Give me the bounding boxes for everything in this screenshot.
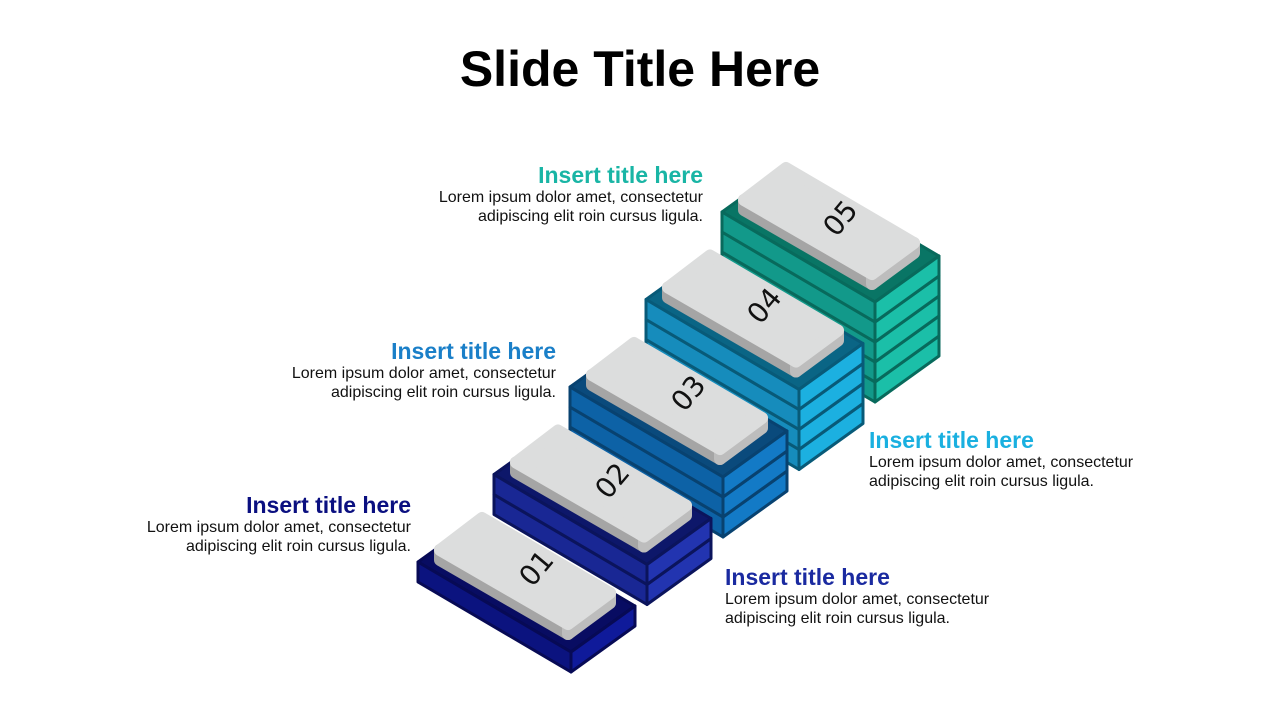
- text block: step 04: Insert title here: [869, 427, 1034, 453]
- step 04: 04: [740, 282, 788, 330]
- text block: step 04: adipiscing elit roin cursus ligula.: [869, 473, 1094, 490]
- text block: step 01: Lorem ipsum dolor amet, consectetur: [147, 519, 411, 536]
- step 03: [570, 341, 787, 537]
- text block: step 01: [147, 492, 411, 555]
- text block: step 05: Insert title here: [538, 162, 703, 188]
- text block: step 03: adipiscing elit roin cursus ligula.: [331, 384, 556, 401]
- text block: step 04: [869, 427, 1133, 490]
- text block: step 02: Insert title here: [725, 564, 890, 590]
- step 02: 02: [588, 457, 636, 505]
- step 05: [722, 166, 939, 402]
- text block: step 03: Lorem ipsum dolor amet, consectetur: [292, 365, 556, 382]
- step 03: 03: [664, 369, 712, 418]
- text block: step 05: Lorem ipsum dolor amet, consectetur: [439, 189, 703, 206]
- text block: step 05: adipiscing elit roin cursus ligula.: [478, 208, 703, 225]
- text block: step 03: [292, 338, 556, 401]
- title: Slide Title Here: [460, 41, 820, 97]
- step 02: [494, 428, 711, 604]
- text block: step 02: [725, 564, 989, 627]
- step 01: 01: [512, 544, 560, 593]
- text block: step 02: adipiscing elit roin cursus ligula.: [725, 610, 950, 627]
- text block: step 03: Insert title here: [391, 338, 556, 364]
- text block: step 01: Insert title here: [246, 492, 411, 518]
- step 01: [418, 516, 635, 672]
- text block: step 05: [439, 162, 703, 225]
- text block: step 04: Lorem ipsum dolor amet, consectetur: [869, 454, 1133, 471]
- step 04: [646, 254, 863, 470]
- text block: step 02: Lorem ipsum dolor amet, consectetur: [725, 591, 989, 608]
- step 05: 05: [816, 194, 864, 243]
- text block: step 01: adipiscing elit roin cursus ligula.: [186, 538, 411, 555]
